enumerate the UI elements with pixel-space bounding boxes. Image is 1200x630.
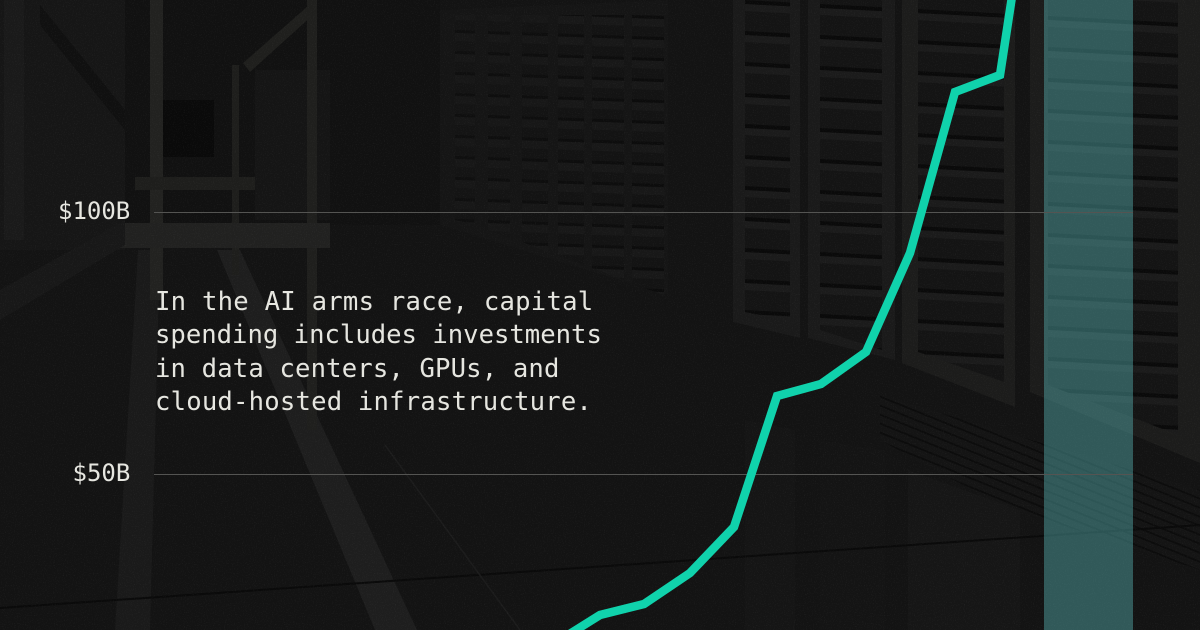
- floor stripes: [115, 250, 160, 630]
- axis label $100B: $100B: [58, 197, 130, 225]
- wall and corridor: [0, 0, 125, 250]
- frames: [150, 0, 163, 300]
- annotation text: [155, 286, 602, 417]
- floor reflections: [880, 395, 1200, 570]
- left racks: [440, 0, 668, 295]
- annotation text: spending includes investments: [155, 320, 602, 350]
- right racks: [733, 0, 800, 338]
- axis label $50B: $50B: [72, 459, 130, 487]
- $100B gridline: [154, 212, 1133, 213]
- annotation text: cloud-hosted infrastructure.: [155, 387, 592, 417]
- annotation text: In the AI arms race, capital: [155, 286, 593, 316]
- highlighted period band: [1044, 0, 1133, 630]
- $50B gridline: [154, 474, 1133, 475]
- annotation text: in data centers, GPUs, and: [155, 354, 560, 384]
